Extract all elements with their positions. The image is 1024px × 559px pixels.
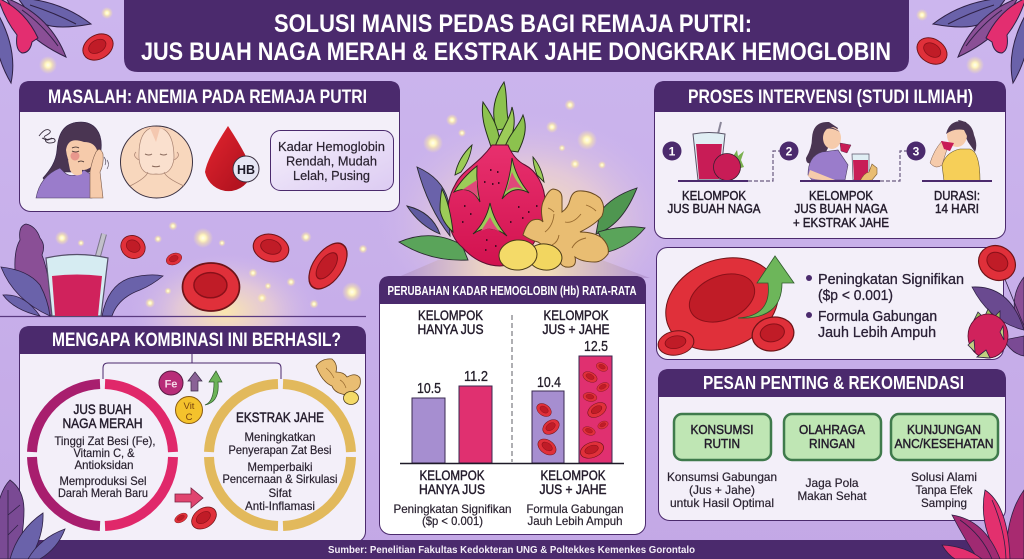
panel header: [654, 81, 1006, 112]
result bullets: Formula Gabungan: [818, 309, 937, 325]
icon: Fe and Vit C absorption: [159, 371, 222, 424]
ring: ekstrak jahe: [209, 384, 351, 526]
ring: jus buah naga: JUS BUAH: [74, 402, 132, 417]
footer source bar: [0, 540, 1024, 559]
panel header: MASALAH: ANEMIA PADA REMAJA PUTRI: [48, 87, 367, 108]
recommendation 1: RUTIN: [704, 437, 740, 451]
chart notes: Jauh Lebih Ampuh: [528, 514, 622, 528]
glass of juice with leaves: [1, 224, 163, 316]
group labels top: [418, 308, 610, 337]
result bullets: Jauh Lebih Ampuh: [818, 325, 936, 341]
recommendation 1: untuk Hasil Optimal: [670, 496, 774, 510]
ginger root: [498, 189, 608, 272]
bar: jus + jahe after: [578, 338, 612, 463]
callout: symptoms: Rendah, Mudah: [286, 154, 377, 168]
result bullets: ($p < 0.001): [818, 288, 893, 304]
icon: Fe and Vit C absorption: C: [186, 412, 193, 423]
ring: jus buah naga: Antioksidan: [74, 458, 134, 472]
recommendation 3: Samping: [921, 496, 967, 510]
step 1: KELOMPOK: [682, 189, 747, 203]
recommendation 2: OLAHRAGA: [799, 423, 866, 437]
step 1: JUS BUAH NAGA: [668, 202, 761, 216]
recommendation 1: [667, 414, 777, 510]
connector bracket: [103, 354, 281, 379]
group labels bottom: KELOMPOK: [420, 468, 484, 483]
callout: symptoms: Kadar Hemoglobin: [278, 139, 385, 154]
ring: ekstrak jahe: Pencernaan & Sirkulasi: [222, 472, 338, 486]
step 2: 2: [786, 144, 793, 158]
panel: proses intervensi: [654, 81, 1006, 238]
decoration: right side leaves and fruit: [968, 239, 1024, 358]
bar: jus before: 10.5: [417, 380, 441, 397]
bar: jus after: 11.2: [464, 368, 488, 385]
leaves behind fruit: [399, 167, 645, 260]
chart notes: [394, 502, 624, 528]
ring: ekstrak jahe: Anti-Inflamasi: [245, 499, 315, 513]
group labels bottom: [419, 468, 606, 497]
step 2: JUS BUAH NAGA: [794, 202, 888, 216]
panel: masalah anemia: [19, 81, 400, 212]
step 3: 14 HARI: [935, 202, 979, 216]
panel header: [19, 326, 366, 354]
callout: symptoms: [270, 130, 394, 190]
result bullets: Peningkatan Signifikan: [818, 272, 964, 288]
recommendation 2: Makan Sehat: [798, 489, 867, 503]
ring: ekstrak jahe: Memperbaiki: [248, 460, 312, 474]
bar: jus + jahe before: 10.4: [537, 374, 561, 391]
ring: jus buah naga: [32, 384, 173, 526]
step 3: [906, 120, 992, 216]
group labels top: KELOMPOK: [544, 308, 608, 323]
panel: mengapa kombinasi: [19, 326, 366, 542]
recommendation 2: Jaga Pola: [806, 476, 859, 490]
bar: jus + jahe before: [532, 374, 564, 463]
title banner: SOLUSI MANIS PEDAS BAGI REMAJA PUTRI:: [274, 10, 752, 38]
panel header: PESAN PENTING & REKOMENDASI: [703, 372, 964, 393]
step 2: [780, 122, 889, 230]
group labels top: JUS + JAHE: [542, 322, 610, 337]
result bullets: [806, 272, 964, 341]
chart header: [379, 276, 646, 304]
bar: jus after: [459, 368, 492, 463]
group labels top: HANYA JUS: [418, 322, 484, 337]
decorative sparkles: [39, 7, 984, 308]
icon: small ginger: [316, 359, 360, 404]
ring: ekstrak jahe: Sifat: [268, 486, 292, 500]
central platform: [396, 260, 650, 278]
arrow to red blood cells: [173, 488, 221, 534]
step 1: [662, 122, 761, 216]
chart notes: Peningkatan Signifikan: [394, 502, 512, 516]
ring: jus buah naga: NAGA MERAH: [62, 416, 142, 431]
panel header: [19, 81, 400, 112]
leaves: top left: [0, 0, 91, 83]
recommendation 3: ANC/KESEHATAN: [894, 437, 994, 451]
illustration: dragon fruit and ginger: [399, 82, 645, 272]
recommendation 1: KONSUMSI: [690, 423, 754, 437]
icon: blood drop with HB: HB: [237, 163, 255, 177]
step 3: 3: [913, 144, 920, 158]
step 1: 1: [669, 144, 676, 158]
recommendation 3: [891, 414, 998, 510]
recommendation 3: KUNJUNGAN: [907, 423, 981, 437]
ring: ekstrak jahe: EKSTRAK JAHE: [236, 410, 324, 425]
footer source bar: Sumber: Penelitian Fakultas Kedokteran UNG & Poltekkes Kemenkes Gorontalo: [328, 544, 695, 556]
callout: symptoms: Lelah, Pusing: [293, 168, 370, 183]
chart header: PERUBAHAN KADAR HEMOGLOBIN (Hb) RATA-RATA: [388, 284, 636, 298]
bar: jus + jahe after: 12.5: [584, 338, 608, 355]
ring: jus buah naga: Vitamin C, &: [74, 446, 134, 460]
panel: pesan penting: [658, 369, 1006, 520]
panel: hasil: [652, 241, 1004, 367]
panel header: MENGAPA KOMBINASI INI BERHASIL?: [52, 330, 341, 351]
ring: ekstrak jahe: Penyerapan Zat Besi: [228, 443, 332, 457]
group labels top: KELOMPOK: [418, 308, 483, 323]
dashed connector: [880, 151, 907, 181]
panel header: PROSES INTERVENSI (STUDI ILMIAH): [688, 87, 973, 108]
group labels bottom: KELOMPOK: [540, 468, 606, 483]
recommendation 3: Tanpa Efek: [916, 483, 973, 497]
step 2: + EKSTRAK JAHE: [793, 216, 889, 230]
leaves: bottom right: [942, 490, 1024, 559]
icon: Fe and Vit C absorption: Vit: [184, 401, 195, 412]
big red blood cell with arrow: [652, 241, 797, 367]
chart notes: Formula Gabungan: [526, 502, 624, 516]
title banner: [124, 0, 909, 72]
title banner: JUS BUAH NAGA MERAH & EKSTRAK JAHE DONGKRAK HEMOGLOBIN: [141, 38, 891, 66]
ring: jus buah naga: Tinggi Zat Besi (Fe),: [54, 434, 156, 448]
recommendation 1: (Jus + Jahe): [689, 483, 755, 497]
leaves: bottom left: [0, 480, 65, 559]
recommendation 3: Solusi Alami: [911, 470, 977, 484]
recommendation 1: Konsumsi Gabungan: [667, 470, 777, 484]
dashed connector: [748, 151, 780, 181]
step 3: DURASI:: [934, 189, 980, 203]
step 2: KELOMPOK: [809, 189, 874, 203]
recommendation 2: [784, 414, 881, 503]
icon: Fe and Vit C absorption: Fe: [165, 378, 177, 390]
dragon fruit: [440, 82, 545, 266]
icon: blood drop with HB: [205, 126, 259, 191]
group labels bottom: JUS + JAHE: [540, 482, 606, 497]
group labels bottom: HANYA JUS: [419, 482, 485, 497]
icon: pale face: [120, 126, 192, 198]
ring: jus buah naga: Darah Merah Baru: [58, 486, 148, 500]
chart notes: ($p < 0.001): [422, 514, 483, 528]
ring: ekstrak jahe: Meningkatkan: [244, 430, 316, 444]
panel: bar chart hemoglobin: [379, 276, 646, 534]
panel header: [658, 369, 1006, 397]
floating red blood cells: [78, 29, 952, 311]
leaves: top right: [933, 0, 1024, 83]
recommendation 2: RINGAN: [809, 437, 855, 451]
bar: jus before: [412, 380, 445, 463]
ring: jus buah naga: Memproduksi Sel: [60, 474, 146, 488]
icon: woman with headache: [36, 122, 108, 198]
